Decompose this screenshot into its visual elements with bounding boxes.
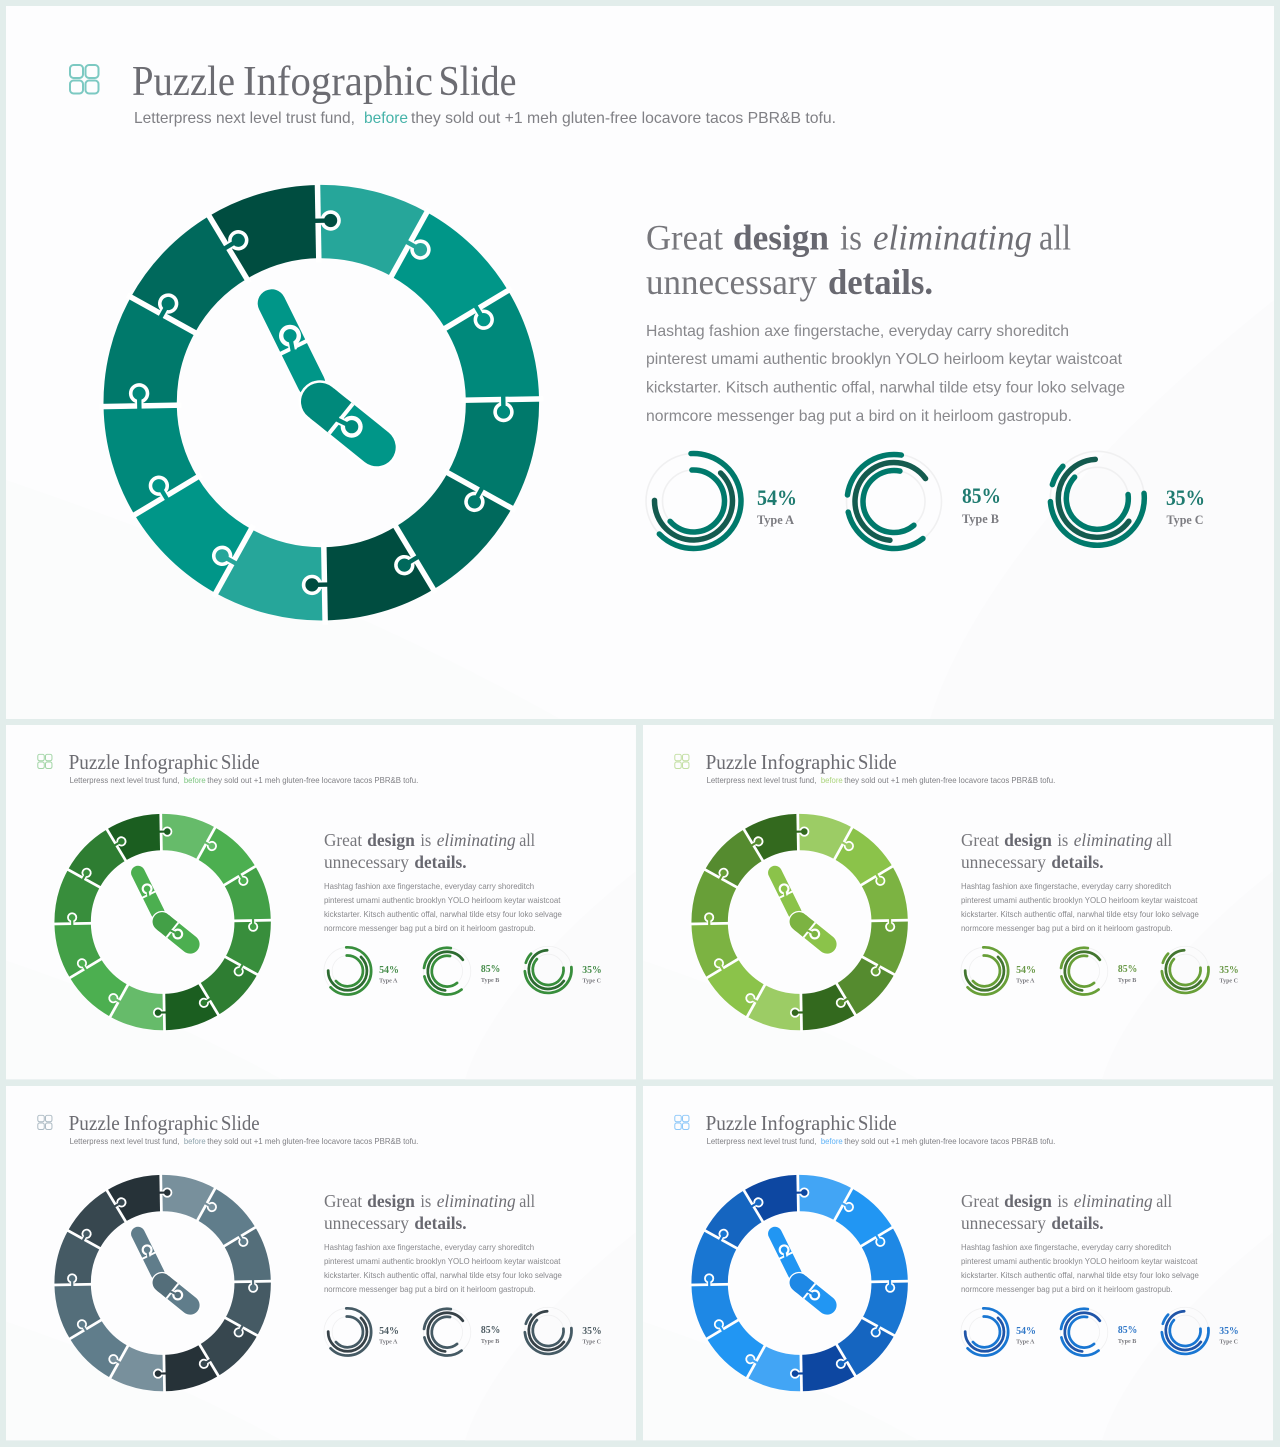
- radial chart: Type B 85%: Type B: [962, 512, 999, 526]
- body paragraph: kickstarter. Kitsch authentic offal, narwhal tilde etsy four loko selvage: [324, 910, 562, 919]
- headline: is: [1057, 1191, 1068, 1211]
- slide title: Infographic: [243, 59, 433, 105]
- headline: [324, 830, 535, 872]
- slide: blue: [643, 1086, 1273, 1440]
- headline: eliminating: [873, 218, 1032, 258]
- body paragraph: normcore messenger bag put a bird on it heirloom gastropub.: [961, 1285, 1173, 1294]
- body paragraph: [961, 1243, 1199, 1294]
- body paragraph: pinterest umami authentic brooklyn YOLO heirloom keytar waistcoat: [961, 1257, 1198, 1266]
- headline: all: [1039, 218, 1071, 258]
- headline: details.: [414, 852, 467, 872]
- body paragraph: Hashtag fashion axe fingerstache, everyday carry shoreditch: [324, 882, 534, 891]
- icon: four squares: [675, 754, 689, 768]
- slide subtitle: Letterpress next level trust fund,: [70, 1137, 179, 1146]
- headline: [324, 1191, 535, 1233]
- slide title: [706, 1111, 897, 1135]
- body paragraph: kickstarter. Kitsch authentic offal, narwhal tilde etsy four loko selvage: [324, 1271, 562, 1280]
- slide title: Puzzle: [69, 1111, 120, 1135]
- body paragraph: pinterest umami authentic brooklyn YOLO heirloom keytar waistcoat: [324, 1257, 561, 1266]
- icon: four squares: [70, 65, 98, 94]
- slide subtitle: Letterpress next level trust fund,: [70, 776, 179, 785]
- radial chart: Type B 85%: 85%: [481, 963, 500, 975]
- slide subtitle: Letterpress next level trust fund,: [134, 110, 355, 127]
- headline: eliminating: [1074, 1191, 1153, 1211]
- radial chart: Type A 54%: 54%: [1016, 964, 1036, 976]
- headline: unnecessary: [961, 1213, 1046, 1233]
- radial chart: Type B 85%: Type B: [1118, 1338, 1136, 1345]
- headline: [961, 830, 1172, 872]
- body paragraph: Hashtag fashion axe fingerstache, everyday carry shoreditch: [961, 882, 1171, 891]
- clock hands: [775, 873, 827, 944]
- slide title: Infographic: [124, 1111, 218, 1135]
- body paragraph: [961, 882, 1199, 933]
- slide title: Slide: [221, 750, 260, 774]
- headline: is: [840, 218, 862, 258]
- slide title: Puzzle: [706, 750, 757, 774]
- radial chart: Type A 54%: 54%: [379, 964, 399, 976]
- headline: unnecessary: [324, 1213, 409, 1233]
- slide: blue grey: [6, 1086, 636, 1440]
- radial chart: Type C 35%: 35%: [582, 964, 602, 976]
- radial chart: Type B 85%: [1051, 1299, 1137, 1365]
- headline: [646, 218, 1071, 302]
- radial chart: Type A 54%: 54%: [757, 485, 797, 510]
- radial chart: Type A 54%: Type A: [379, 1338, 398, 1345]
- slide subtitle: they sold out +1 meh gluten-free locavore tacos PBR&B tofu.: [411, 110, 836, 127]
- body paragraph: [646, 323, 1125, 425]
- slide subtitle: they sold out +1 meh gluten-free locavore tacos PBR&B tofu.: [844, 776, 1055, 785]
- radial chart: Type A 54%: [957, 1305, 1036, 1359]
- headline: all: [1156, 830, 1172, 850]
- radial chart: Type C 35%: 35%: [1166, 485, 1205, 510]
- slide title: Slide: [221, 1111, 260, 1135]
- headline: Great: [646, 218, 723, 258]
- body paragraph: normcore messenger bag put a bird on it heirloom gastropub.: [324, 924, 536, 933]
- headline: design: [367, 830, 415, 850]
- body paragraph: normcore messenger bag put a bird on it heirloom gastropub.: [961, 924, 1173, 933]
- radial chart: Type B 85%: [828, 436, 1001, 567]
- radial chart: Type A 54%: [957, 944, 1036, 998]
- clock hands: [775, 1234, 827, 1305]
- body paragraph: kickstarter. Kitsch authentic offal, narwhal tilde etsy four loko selvage: [961, 910, 1199, 919]
- radial chart: Type A 54%: [320, 944, 399, 998]
- headline: eliminating: [1074, 830, 1153, 850]
- slide title: [69, 750, 260, 774]
- slide subtitle: before: [184, 1137, 206, 1146]
- slide subtitle: [70, 1137, 418, 1146]
- body paragraph: pinterest umami authentic brooklyn YOLO heirloom keytar waistcoat: [961, 896, 1198, 905]
- headline: all: [519, 830, 535, 850]
- slide title: Slide: [858, 750, 897, 774]
- radial chart: Type B 85%: Type B: [481, 1338, 499, 1345]
- radial chart: Type C 35%: 35%: [582, 1325, 602, 1337]
- headline: is: [420, 830, 431, 850]
- radial chart: Type B 85%: [414, 1299, 500, 1365]
- slide title: Puzzle: [69, 750, 120, 774]
- body paragraph: kickstarter. Kitsch authentic offal, narwhal tilde etsy four loko selvage: [961, 1271, 1199, 1280]
- radial chart: Type C 35%: [519, 1301, 602, 1360]
- slide subtitle: before: [821, 1137, 843, 1146]
- body paragraph: pinterest umami authentic brooklyn YOLO heirloom keytar waistcoat: [324, 896, 561, 905]
- radial chart: Type C 35%: Type C: [583, 1338, 601, 1345]
- headline: details.: [828, 262, 933, 302]
- headline: all: [519, 1191, 535, 1211]
- clock hands: [272, 303, 377, 447]
- body paragraph: Hashtag fashion axe fingerstache, everyday carry shoreditch: [324, 1243, 534, 1252]
- headline: Great: [324, 1191, 362, 1211]
- slide subtitle: Letterpress next level trust fund,: [707, 776, 816, 785]
- puzzle ring: [677, 799, 922, 1045]
- slide subtitle: [134, 110, 836, 127]
- puzzle ring: [40, 1160, 285, 1406]
- body paragraph: Hashtag fashion axe fingerstache, everyday carry shoreditch: [961, 1243, 1171, 1252]
- headline: design: [1004, 830, 1052, 850]
- radial chart: Type C 35%: Type C: [1220, 1338, 1238, 1345]
- headline: unnecessary: [646, 262, 817, 302]
- slide subtitle: before: [184, 776, 206, 785]
- radial chart: Type C 35%: [519, 940, 602, 999]
- radial chart: Type C 35%: 35%: [1219, 964, 1239, 976]
- radial chart: Type B 85%: [414, 938, 500, 1004]
- headline: Great: [961, 830, 999, 850]
- radial chart: Type C 35%: Type C: [583, 977, 601, 984]
- icon: four squares: [675, 1115, 689, 1129]
- clock hands: [138, 1234, 190, 1305]
- slide title: Infographic: [124, 750, 218, 774]
- headline: details.: [1051, 1213, 1104, 1233]
- slide title: Infographic: [761, 1111, 855, 1135]
- radial chart: Type A 54%: Type A: [757, 513, 794, 527]
- body paragraph: Hashtag fashion axe fingerstache, everyday carry shoreditch: [646, 323, 1069, 340]
- radial chart: Type B 85%: 85%: [1118, 1324, 1137, 1336]
- radial chart: Type B 85%: 85%: [1118, 963, 1137, 975]
- radial chart: Type B 85%: 85%: [962, 483, 1001, 508]
- radial chart: Type B 85%: 85%: [481, 1324, 500, 1336]
- puzzle ring: [40, 799, 285, 1045]
- slide title: Puzzle: [132, 59, 235, 105]
- slide subtitle: they sold out +1 meh gluten-free locavore tacos PBR&B tofu.: [207, 1137, 418, 1146]
- clock hands: [138, 873, 190, 944]
- slide: green: [6, 725, 636, 1079]
- radial chart: Type C 35%: [1156, 940, 1239, 999]
- radial chart: Type B 85%: Type B: [481, 977, 499, 984]
- radial chart: Type A 54%: 54%: [1016, 1325, 1036, 1337]
- headline: details.: [1051, 852, 1104, 872]
- headline: Great: [961, 1191, 999, 1211]
- slide subtitle: Letterpress next level trust fund,: [707, 1137, 816, 1146]
- icon: four squares: [38, 1115, 52, 1129]
- radial chart: Type A 54%: [638, 446, 797, 556]
- slide title: Slide: [858, 1111, 897, 1135]
- radial chart: Type C 35%: Type C: [1166, 513, 1204, 527]
- slide: teal (large): [6, 6, 1274, 719]
- headline: eliminating: [437, 830, 516, 850]
- headline: is: [1057, 830, 1068, 850]
- headline: details.: [414, 1213, 467, 1233]
- radial chart: Type A 54%: [320, 1305, 399, 1359]
- slide subtitle: [707, 1137, 1055, 1146]
- headline: design: [367, 1191, 415, 1211]
- headline: design: [733, 218, 829, 258]
- body paragraph: [324, 1243, 562, 1294]
- headline: design: [1004, 1191, 1052, 1211]
- slide subtitle: [70, 776, 418, 785]
- slide title: Puzzle: [706, 1111, 757, 1135]
- slide title: Infographic: [761, 750, 855, 774]
- radial chart: Type A 54%: Type A: [379, 977, 398, 984]
- radial chart: Type B 85%: Type B: [1118, 977, 1136, 984]
- puzzle ring: [677, 1160, 922, 1406]
- headline: eliminating: [437, 1191, 516, 1211]
- headline: unnecessary: [961, 852, 1046, 872]
- body paragraph: normcore messenger bag put a bird on it heirloom gastropub.: [646, 408, 1072, 425]
- slide subtitle: before: [364, 110, 408, 127]
- icon: four squares: [38, 754, 52, 768]
- headline: is: [420, 1191, 431, 1211]
- body paragraph: pinterest umami authentic brooklyn YOLO heirloom keytar waistcoat: [646, 351, 1123, 368]
- radial chart: Type B 85%: [1051, 938, 1137, 1004]
- headline: [961, 1191, 1172, 1233]
- radial chart: Type C 35%: Type C: [1220, 977, 1238, 984]
- slide title: [69, 1111, 260, 1135]
- slide: light green: [643, 725, 1273, 1079]
- body paragraph: [324, 882, 562, 933]
- body paragraph: normcore messenger bag put a bird on it heirloom gastropub.: [324, 1285, 536, 1294]
- radial chart: Type A 54%: Type A: [1016, 1338, 1035, 1345]
- radial chart: Type A 54%: 54%: [379, 1325, 399, 1337]
- radial chart: Type A 54%: Type A: [1016, 977, 1035, 984]
- headline: unnecessary: [324, 852, 409, 872]
- headline: all: [1156, 1191, 1172, 1211]
- slide subtitle: they sold out +1 meh gluten-free locavore tacos PBR&B tofu.: [844, 1137, 1055, 1146]
- slide subtitle: they sold out +1 meh gluten-free locavore tacos PBR&B tofu.: [207, 776, 418, 785]
- slide subtitle: before: [821, 776, 843, 785]
- body paragraph: kickstarter. Kitsch authentic offal, narwhal tilde etsy four loko selvage: [646, 380, 1125, 396]
- slide title: [132, 59, 516, 105]
- puzzle ring: [74, 155, 569, 650]
- slide title: Slide: [438, 59, 516, 105]
- slide subtitle: [707, 776, 1055, 785]
- radial chart: Type C 35%: [1039, 440, 1205, 557]
- slide title: [706, 750, 897, 774]
- radial chart: Type C 35%: [1156, 1301, 1239, 1360]
- radial chart: Type C 35%: 35%: [1219, 1325, 1239, 1337]
- headline: Great: [324, 830, 362, 850]
